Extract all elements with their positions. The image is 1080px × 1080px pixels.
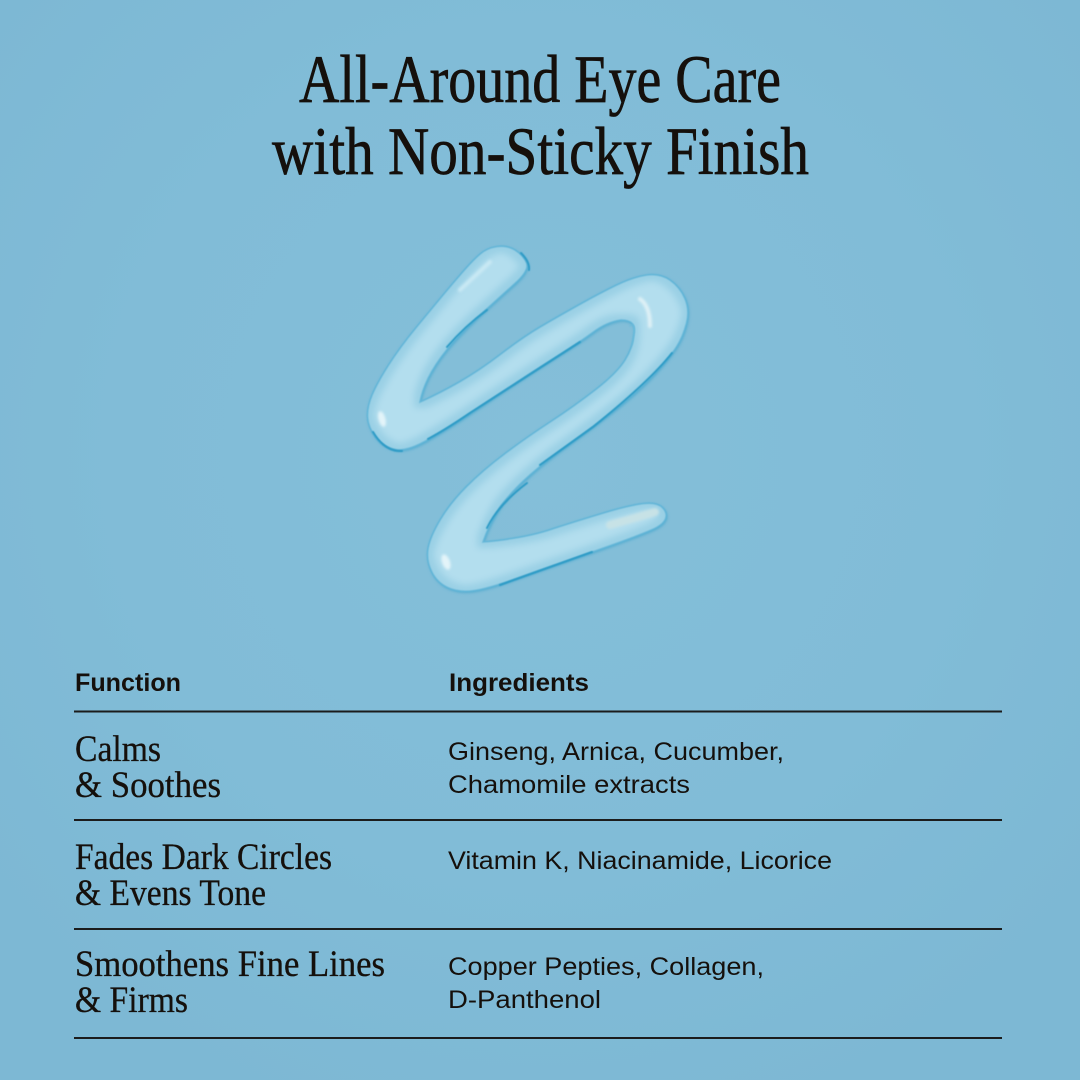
row 2 function: & Evens Tone [75, 873, 266, 914]
row 3 function: & Firms [75, 980, 188, 1021]
row 3 function: Smoothens Fine Lines [75, 944, 385, 985]
gel edge shading [373, 253, 672, 585]
row 2 function [75, 837, 332, 914]
table header: ingredients: Ingredients [449, 669, 589, 697]
gel swatch illustration [367, 246, 689, 593]
row 2 ingredients: Vitamin K, Niacinamide, Licorice [448, 847, 832, 875]
row 1 ingredients [448, 738, 784, 799]
row 3 ingredients [448, 953, 764, 1014]
row 3 ingredients: D-Panthenol [448, 986, 601, 1014]
row 1 function: & Soothes [75, 765, 221, 806]
title: with Non-Sticky Finish [272, 113, 809, 189]
title [272, 41, 809, 189]
title: All-Around Eye Care [299, 41, 781, 117]
row 3 ingredients: Copper Pepties, Collagen, [448, 953, 764, 981]
row 3 function [75, 944, 385, 1021]
table header: function: Function [75, 669, 181, 697]
row 1 function [75, 729, 221, 806]
row 2 function: Fades Dark Circles [75, 837, 332, 878]
row 1 ingredients: Chamomile extracts [448, 771, 690, 799]
gel highlights [377, 262, 655, 571]
row 1 function: Calms [75, 729, 161, 770]
row 1 ingredients: Ginseng, Arnica, Cucumber, [448, 738, 784, 766]
